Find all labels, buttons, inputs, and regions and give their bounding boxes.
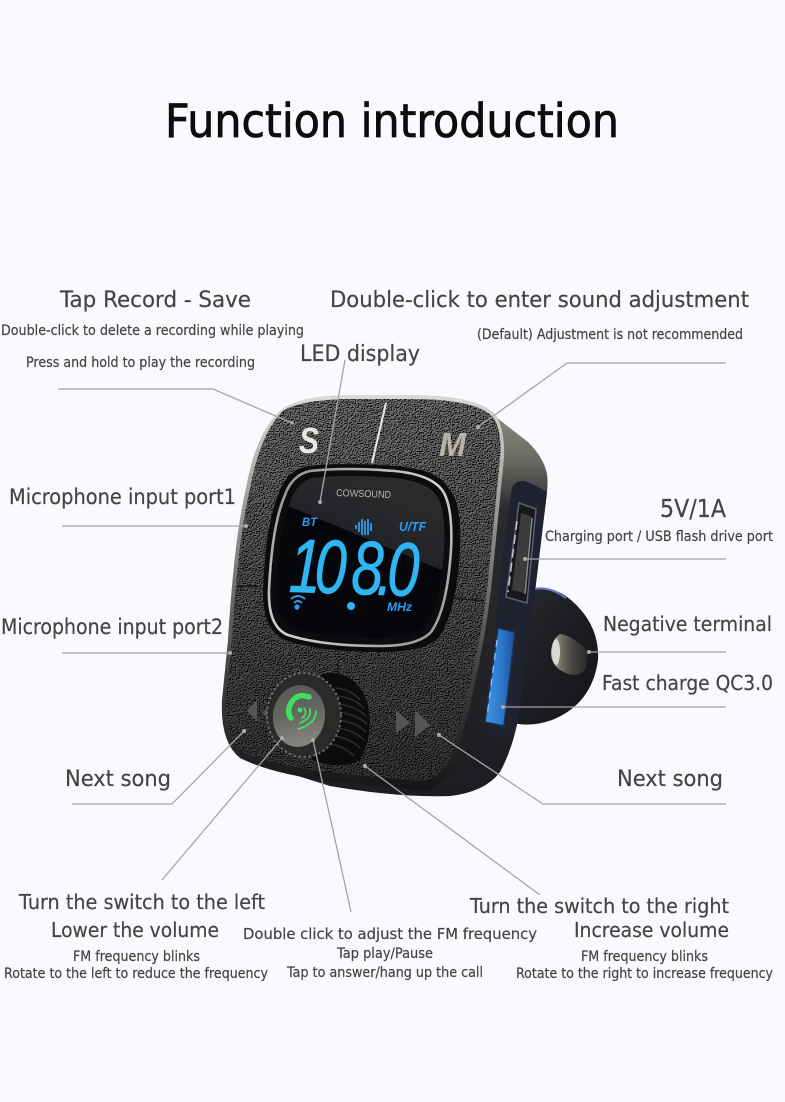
USB port	[506, 503, 536, 603]
label: tap record: Tap Record - Save	[59, 288, 251, 313]
label: turn left	[4, 890, 268, 982]
label: centre button	[243, 925, 537, 981]
leader line: sound adjustment	[476, 363, 726, 429]
label: fast charge: Fast charge QC3.0	[602, 671, 773, 695]
leader line: next song right	[437, 733, 726, 804]
label: 5V/1A charging port	[545, 494, 773, 545]
brand name: COWSOUND	[336, 488, 391, 501]
leather face	[220, 395, 510, 790]
leader line: centre button	[311, 738, 351, 912]
label: next song left: Next song	[65, 767, 171, 792]
label: 5V/1A charging port: 5V/1A	[660, 494, 726, 523]
label: next song right: Next song	[617, 767, 723, 792]
label: turn right	[469, 894, 773, 982]
leader line: LED display	[318, 360, 345, 504]
leader line: turn right	[363, 764, 540, 895]
label: turn left: Lower the volume	[51, 918, 219, 942]
display dot	[347, 602, 355, 610]
title: Function introduction	[165, 94, 619, 148]
leader line: microphone 2	[62, 651, 232, 655]
label: microphone input port 2: Microphone input port2	[1, 615, 223, 639]
button letter S: S	[299, 420, 319, 461]
leader line: negative terminal	[587, 650, 726, 654]
icon: previous arrows	[247, 700, 275, 723]
label: centre button: Tap to answer/hang up the call	[286, 965, 483, 981]
QC3.0 port	[485, 628, 515, 726]
label: negative terminal: Negative terminal	[603, 612, 772, 636]
rotary knob	[267, 673, 370, 765]
frequency readout: 108.0	[288, 524, 421, 613]
display status U/TF: U/TF	[399, 519, 427, 534]
leader line: tap record	[58, 389, 294, 425]
icon: green phone	[289, 696, 316, 729]
label: LED display: LED display	[300, 342, 420, 367]
label: turn left: Turn the switch to the left	[18, 890, 265, 914]
icon: next arrows	[396, 710, 430, 737]
icon: sound wave	[356, 519, 371, 535]
car charger device	[220, 395, 598, 796]
port panel	[486, 481, 547, 737]
label: tap record	[1, 288, 304, 371]
label: turn left: Rotate to the left to reduce the frequency	[4, 966, 268, 982]
label: turn right: Increase volume	[574, 918, 729, 942]
icon: wifi	[291, 596, 305, 609]
label: turn right: Turn the switch to the right	[469, 894, 729, 918]
label: centre button: Double click to adjust the FM frequency	[243, 925, 537, 943]
divider seam	[372, 403, 386, 463]
label: turn right: FM frequency blinks	[581, 949, 708, 965]
metal tip	[551, 634, 588, 675]
leader line: charging port	[523, 557, 726, 561]
label: turn left: FM frequency blinks	[73, 949, 200, 965]
label: sound adjustment: Double-click to enter sound adjustment	[330, 288, 749, 313]
LED screen	[263, 464, 460, 652]
leader line: turn left	[162, 736, 284, 880]
button letter M: M	[439, 426, 467, 463]
label: tap record: Press and hold to play the recording	[26, 355, 255, 371]
label: sound adjustment	[330, 288, 749, 343]
display status BT: BT	[302, 515, 319, 529]
display unit MHz: MHz	[387, 600, 412, 614]
leader line: microphone 1	[62, 524, 248, 528]
leader line: next song left	[72, 729, 246, 804]
side housing	[240, 414, 548, 796]
leader line: fast charge	[501, 705, 726, 709]
label: tap record: Double-click to delete a recording while playing	[1, 323, 304, 339]
front rim	[222, 395, 504, 790]
label: centre button: Tap play/Pause	[336, 946, 433, 962]
plug barrel	[508, 588, 598, 725]
label: microphone input port 1: Microphone input port1	[9, 485, 236, 509]
label: sound adjustment: (Default) Adjustment is not recommended	[477, 327, 743, 343]
